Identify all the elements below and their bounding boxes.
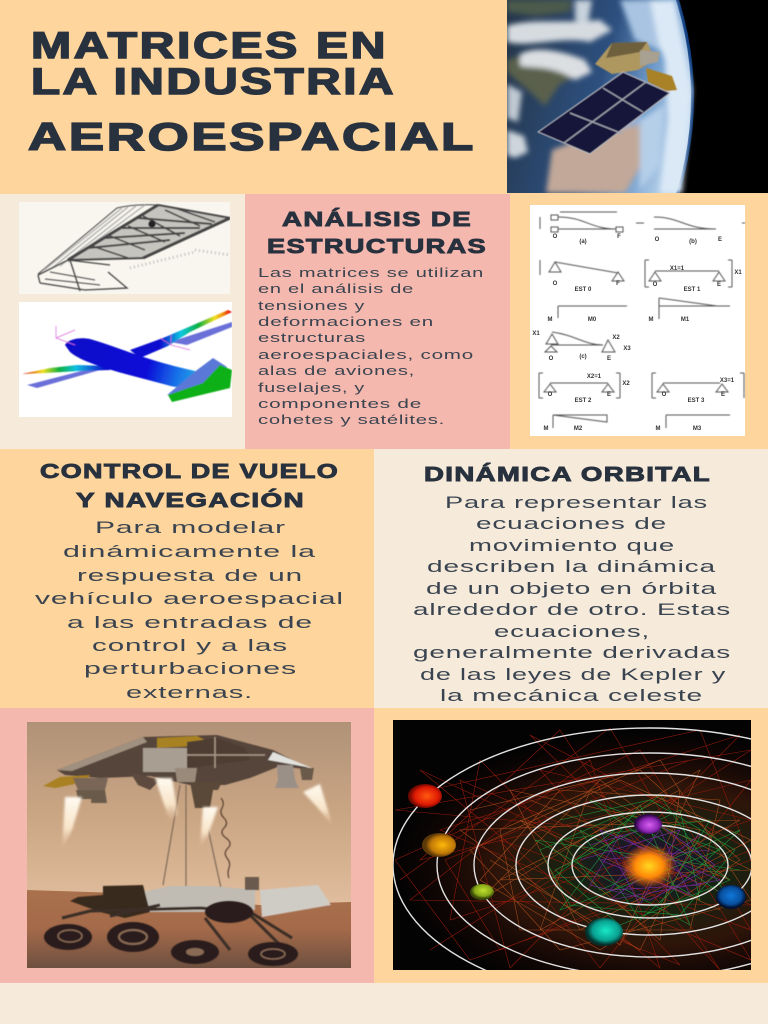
text block: dinámicamente la bbox=[63, 543, 317, 561]
image: beam diagrams: O bbox=[549, 356, 554, 362]
text block: movimiento que bbox=[469, 537, 675, 555]
image: beam diagrams: X2=1 bbox=[587, 374, 602, 380]
panel: title header bbox=[0, 0, 768, 194]
image: beam diagrams: X3 bbox=[623, 346, 631, 352]
text block: de las leyes de Kepler y bbox=[420, 666, 726, 684]
text block: alas de aviones, bbox=[258, 363, 415, 378]
image: beam diagrams: O bbox=[653, 282, 658, 288]
text block: de un objeto en órbita bbox=[426, 580, 718, 598]
panel: control de vuelo bbox=[0, 449, 374, 708]
heading bbox=[267, 208, 487, 258]
heading: CONTROL DE VUELO bbox=[40, 460, 339, 483]
title: AEROESPACIAL bbox=[28, 116, 476, 159]
image: beam diagrams: M3 bbox=[693, 426, 702, 432]
image: beam diagrams: M2 bbox=[574, 426, 583, 432]
text block bbox=[35, 519, 344, 702]
image: beam diagrams: M0 bbox=[588, 317, 597, 323]
satellite body bbox=[538, 42, 677, 154]
text block: estructuras bbox=[258, 330, 366, 345]
text block: a las entradas de bbox=[67, 614, 313, 632]
image: beam diagrams: M bbox=[656, 426, 660, 432]
image: beam diagrams: O bbox=[553, 281, 558, 287]
text block: control y a las bbox=[92, 637, 288, 655]
image: beam diagrams: M bbox=[648, 317, 654, 323]
text block: describen la dinámica bbox=[427, 558, 717, 576]
text block: Las matrices se utilizan bbox=[258, 265, 484, 280]
image: aircraft stress model bbox=[19, 302, 232, 417]
image: beam diagrams: E bbox=[721, 392, 725, 398]
image: beam diagrams: O bbox=[548, 392, 553, 398]
image: beam diagrams: X1 bbox=[532, 331, 540, 337]
text block: ecuaciones, bbox=[494, 623, 650, 641]
image: beam diagrams: (a) bbox=[579, 239, 587, 245]
image: orbital paths and planets bbox=[393, 720, 751, 970]
image: beam diagrams: X1 bbox=[734, 270, 742, 276]
text block bbox=[413, 494, 731, 705]
image: sky crane and rover bbox=[27, 722, 351, 968]
panel: orbit image bbox=[374, 708, 768, 1002]
image: beam diagrams: E bbox=[718, 237, 722, 243]
text block: externas. bbox=[126, 684, 253, 702]
title bbox=[28, 24, 476, 159]
image: beam diagrams: E bbox=[607, 392, 611, 398]
image: beam diagrams: (b) bbox=[689, 239, 697, 245]
image: beam diagrams: EST 2 bbox=[575, 398, 592, 404]
text block: en el análisis de bbox=[258, 281, 414, 296]
image: beam diagrams: O bbox=[662, 392, 667, 398]
image: beam diagrams: EST 1 bbox=[684, 287, 701, 293]
image: wing structure drawing bbox=[19, 202, 230, 294]
text block: componentes de bbox=[258, 396, 422, 411]
text block: ecuaciones de bbox=[476, 515, 667, 533]
image: beam diagrams: EST 3 bbox=[688, 398, 705, 404]
text block: aeroespaciales, como bbox=[258, 347, 474, 362]
text block: generalmente derivadas bbox=[413, 644, 731, 662]
image: beam diagrams: X1=1 bbox=[670, 266, 685, 272]
text block: tensiones y bbox=[258, 298, 365, 313]
image: beam diagrams: X2 bbox=[622, 381, 630, 387]
text block: deformaciones en bbox=[258, 314, 434, 329]
image: beam diagrams: E bbox=[717, 282, 721, 288]
image: satellite over Earth bbox=[507, 0, 768, 193]
heading: ANÁLISIS DE bbox=[282, 208, 472, 231]
heading bbox=[40, 460, 339, 512]
image: beam diagrams: (c) bbox=[579, 354, 587, 360]
image: beam diagrams: F bbox=[617, 234, 621, 240]
text block: Para modelar bbox=[95, 519, 286, 537]
panel: structural diagrams bbox=[510, 194, 768, 449]
heading: ESTRUCTURAS bbox=[267, 235, 487, 258]
text block: cohetes y satélites. bbox=[258, 412, 445, 427]
image: beam diagrams: E bbox=[607, 356, 611, 362]
text block: vehículo aeroespacial bbox=[35, 590, 344, 608]
image: beam diagrams: O bbox=[553, 234, 558, 240]
image: beam diagrams: M1 bbox=[681, 317, 690, 323]
image: beam diagrams: X2 bbox=[612, 335, 620, 341]
text block: fuselajes, y bbox=[258, 380, 365, 395]
panel: análisis de estructuras bbox=[245, 194, 510, 449]
text block: alrededor de otro. Estas bbox=[413, 601, 731, 619]
title: LA INDUSTRIA bbox=[31, 60, 396, 102]
image: beam diagrams: X3=1 bbox=[720, 378, 735, 384]
text block bbox=[258, 265, 484, 427]
image: beam diagrams bbox=[530, 205, 745, 436]
heading: DINÁMICA ORBITAL bbox=[424, 463, 711, 486]
text block: Para representar las bbox=[445, 494, 708, 512]
image: beam diagrams: M bbox=[548, 317, 552, 323]
image: beam diagrams: O bbox=[655, 237, 660, 243]
text block: perturbaciones bbox=[84, 660, 297, 678]
text block: la mecánica celeste bbox=[440, 687, 703, 705]
title: MATRICES EN bbox=[31, 24, 388, 66]
panel: left images bbox=[19, 202, 232, 417]
image: beam diagrams: F bbox=[616, 281, 620, 287]
text block: respuesta de un bbox=[77, 567, 303, 585]
panel: rover image bbox=[0, 708, 374, 983]
heading: Y NAVEGACIÓN bbox=[76, 488, 305, 512]
image: beam diagrams: EST 0 bbox=[575, 287, 592, 293]
panel: dinámica orbital bbox=[374, 449, 768, 708]
image: beam diagrams: M bbox=[544, 426, 548, 432]
